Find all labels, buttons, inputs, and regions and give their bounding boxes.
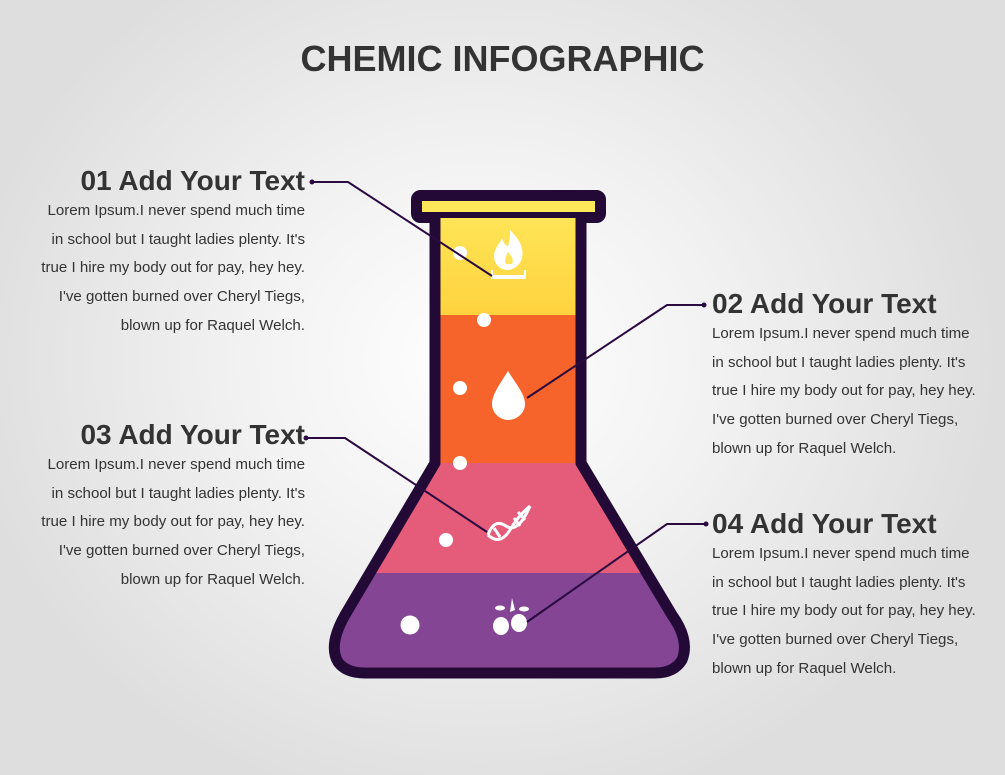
text block 01 bbox=[41, 165, 305, 334]
flask diagram bbox=[304, 180, 708, 678]
text block 03: I've gotten burned over Cheryl Tiegs, bbox=[59, 542, 305, 559]
text block 04: in school but I taught ladies plenty. It's bbox=[712, 574, 965, 591]
text block 03 bbox=[41, 419, 305, 588]
icon: olives bbox=[493, 598, 529, 635]
text block 03: blown up for Raquel Welch. bbox=[121, 571, 305, 588]
icon: burner flame bbox=[491, 230, 526, 279]
text block 01: in school but I taught ladies plenty. It's bbox=[52, 231, 305, 248]
flask bbox=[328, 190, 690, 678]
text block 02: in school but I taught ladies plenty. It's bbox=[712, 354, 965, 371]
icon: drop bbox=[492, 371, 525, 420]
text block 01: blown up for Raquel Welch. bbox=[121, 317, 305, 334]
text block 01: 01 Add Your Text bbox=[80, 165, 305, 196]
text block 04: Lorem Ipsum.I never spend much time bbox=[712, 545, 970, 562]
connector lines bbox=[306, 182, 706, 622]
icon: dna bbox=[488, 506, 530, 539]
text block 01: true I hire my body out for pay, hey hey. bbox=[41, 259, 305, 276]
title: CHEMIC INFOGRAPHIC bbox=[300, 38, 704, 79]
text block 04: I've gotten burned over Cheryl Tiegs, bbox=[712, 631, 958, 648]
text block 02: I've gotten burned over Cheryl Tiegs, bbox=[712, 411, 958, 428]
text block 02: true I hire my body out for pay, hey hey. bbox=[712, 382, 976, 399]
text block 04: blown up for Raquel Welch. bbox=[712, 660, 896, 677]
bubbles bbox=[400, 246, 491, 634]
text block 01: Lorem Ipsum.I never spend much time bbox=[47, 202, 305, 219]
text block 02: 02 Add Your Text bbox=[712, 288, 937, 319]
text block 04 bbox=[712, 508, 976, 677]
text block 02: blown up for Raquel Welch. bbox=[712, 440, 896, 457]
text block 04: true I hire my body out for pay, hey hey. bbox=[712, 602, 976, 619]
text block 04: 04 Add Your Text bbox=[712, 508, 937, 539]
text block 03: Lorem Ipsum.I never spend much time bbox=[47, 456, 305, 473]
text block 02: Lorem Ipsum.I never spend much time bbox=[712, 325, 970, 342]
text block 02 bbox=[712, 288, 976, 457]
connector dots bbox=[304, 180, 708, 526]
text block 03: 03 Add Your Text bbox=[80, 419, 305, 450]
text block 01: I've gotten burned over Cheryl Tiegs, bbox=[59, 288, 305, 305]
text block 03: true I hire my body out for pay, hey hey. bbox=[41, 513, 305, 530]
text block 03: in school but I taught ladies plenty. It's bbox=[52, 485, 305, 502]
